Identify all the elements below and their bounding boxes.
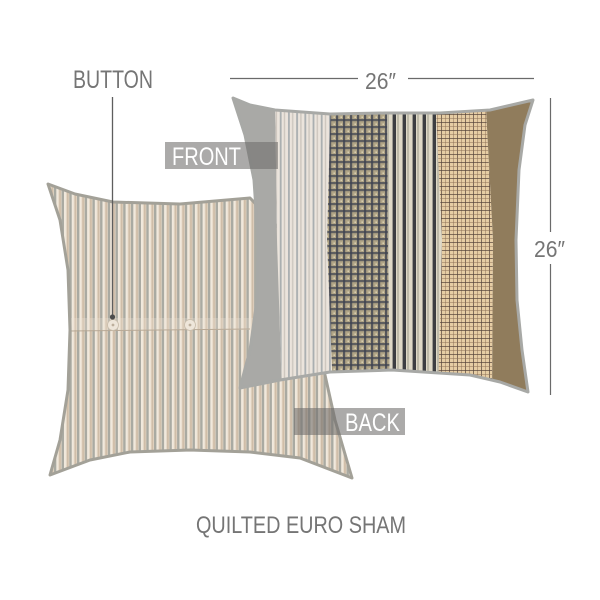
label bar: FRONT: FRONT — [172, 143, 241, 171]
caption: QUILTED EURO SHAM — [196, 512, 406, 539]
label bar: BACK — [294, 408, 405, 437]
panel: black stripe — [387, 114, 442, 372]
icon: button right — [184, 320, 196, 330]
panel: ticking stripe — [275, 112, 332, 378]
panel: dark plaid — [327, 114, 390, 370]
panel: khaki solid — [486, 102, 531, 390]
dimension: height 26 inches: 26″ — [534, 236, 565, 262]
panel: gray chambray — [236, 101, 282, 386]
label bar: BACK: BACK — [345, 409, 400, 437]
pillow: back of sham — [48, 184, 352, 478]
callout: BUTTON label: BUTTON — [73, 66, 153, 94]
pillow: front of sham — [225, 90, 540, 395]
dimension: width 26 inches: 26″ — [365, 68, 396, 94]
icon: button left — [108, 320, 118, 330]
callout line: button pointer — [110, 97, 115, 320]
panel: tan plaid — [436, 112, 493, 378]
